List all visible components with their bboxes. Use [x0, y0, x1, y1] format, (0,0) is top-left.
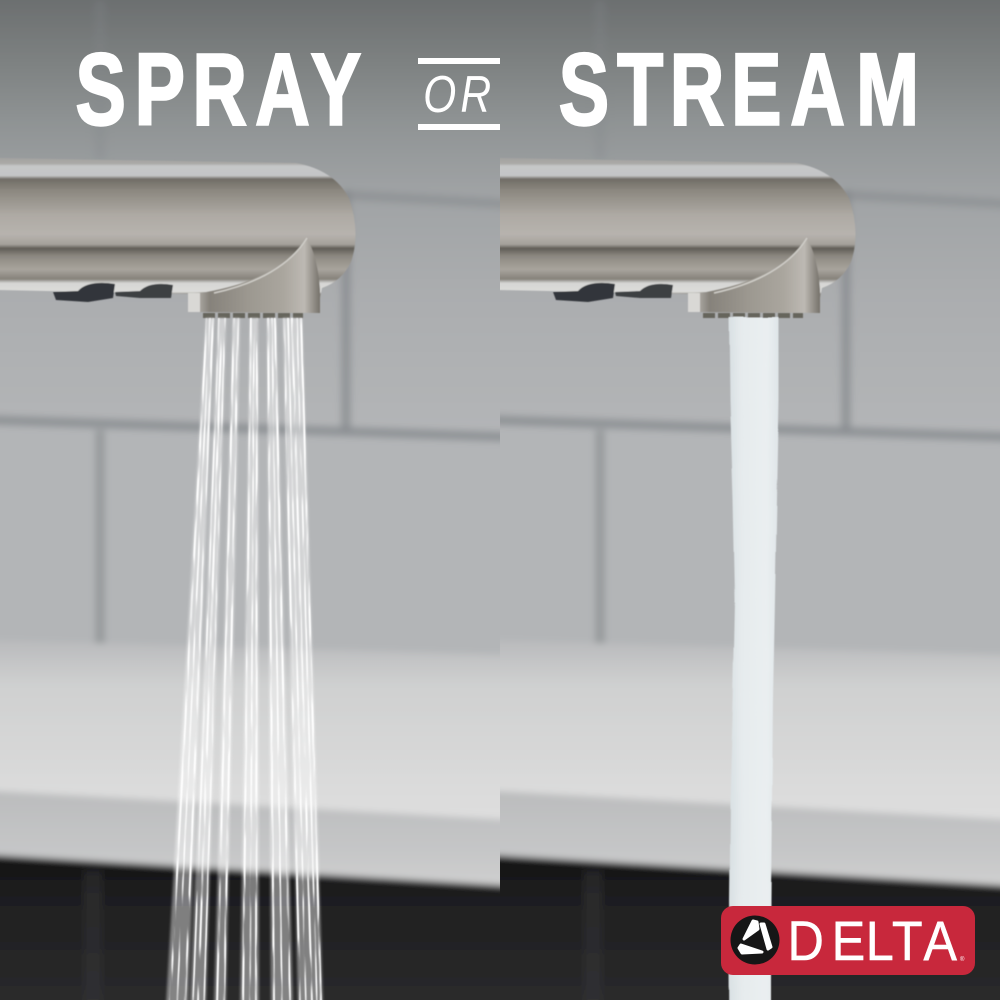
water: solid stream — [729, 317, 779, 1000]
logo: Delta badge — [721, 906, 975, 975]
panel: spray background — [0, 0, 510, 1000]
title: stream: STREAM — [559, 34, 919, 147]
title: or with rules: OR — [423, 66, 495, 124]
icon: Delta triangle emblem — [730, 916, 780, 964]
logo: Delta badge: ® — [960, 956, 965, 963]
water: spray strands — [166, 318, 323, 1000]
logo wordmark: DELTA — [788, 911, 957, 973]
title: spray: SPRAY — [75, 34, 361, 147]
faucet: spray side — [0, 158, 356, 316]
faucet: stream side — [498, 158, 856, 316]
panel: stream background — [490, 0, 1000, 1000]
